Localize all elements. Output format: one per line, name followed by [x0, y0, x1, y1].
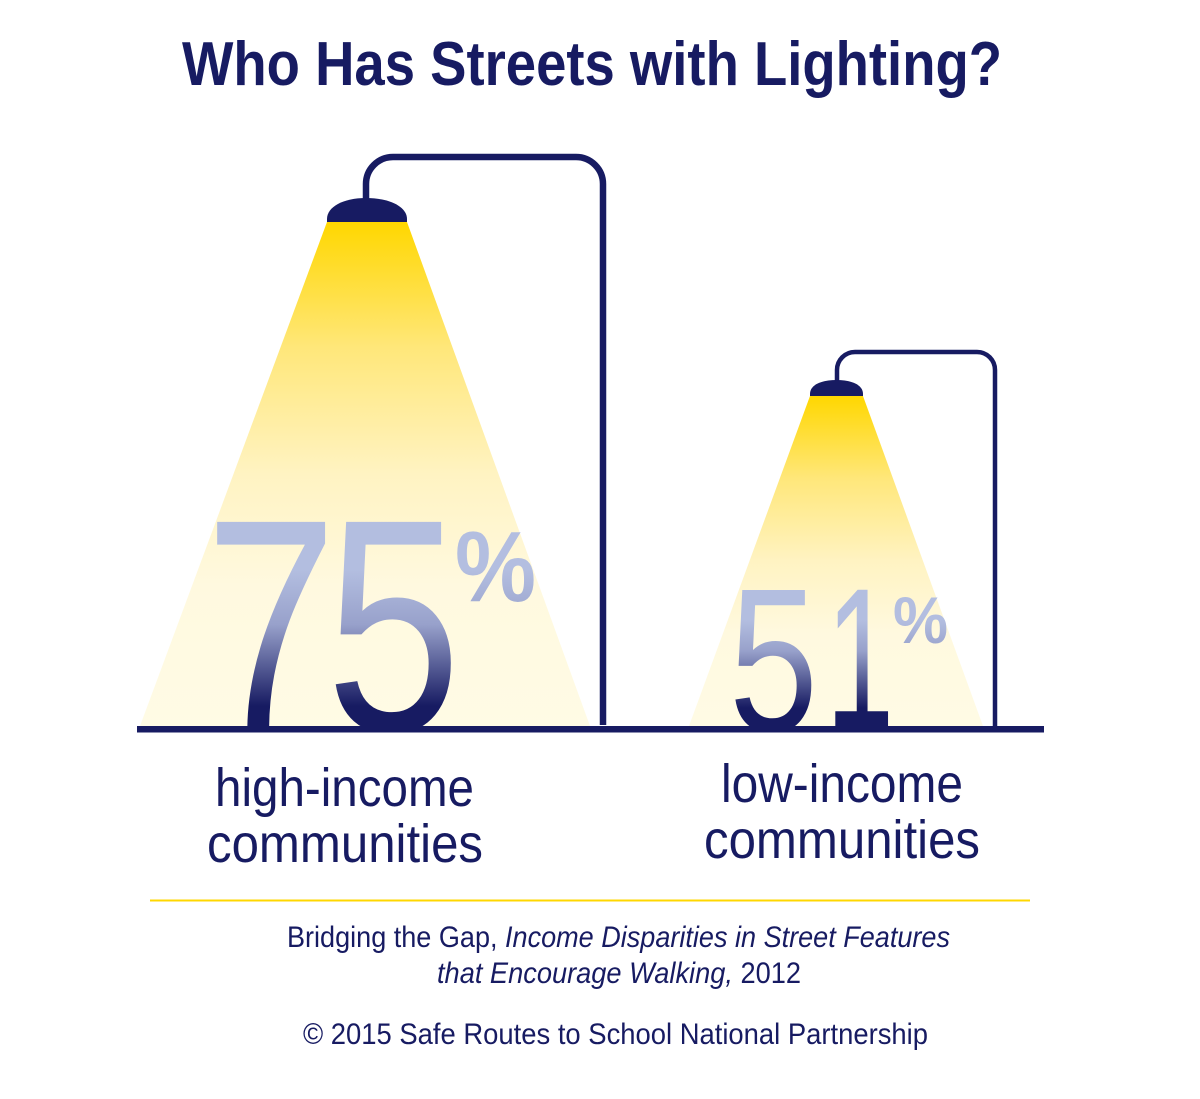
statistic: 51 percent: 5 — [729, 546, 818, 775]
source citation: that Encourage Walking, 2012 — [437, 957, 808, 990]
title: Who Has Streets with Lighting? — [182, 30, 1002, 99]
label: low-income communities: low-income — [721, 754, 963, 814]
statistic: 51 percent: 1 — [826, 547, 894, 768]
statistic: 75 percent: 5 — [326, 457, 461, 796]
lamp head: low-income — [810, 380, 863, 396]
label: low-income communities: communities — [704, 810, 980, 870]
lamp pole: low-income — [837, 352, 995, 727]
lamp pole: high-income — [366, 157, 603, 725]
statistic: 51 percent: % — [893, 583, 948, 657]
statistic: 75 percent: 7 — [205, 457, 337, 796]
label: high-income communities: communities — [207, 814, 483, 874]
statistic: 75 percent — [217, 522, 534, 726]
lamp head: high-income — [327, 198, 407, 222]
ground line — [137, 726, 1044, 732]
infographic — [137, 40, 1044, 1050]
source citation: Bridging the Gap, Income Disparities in Street Features — [287, 921, 999, 954]
statistic: 75 percent: % — [455, 511, 536, 623]
label: high-income communities: high-income — [215, 758, 474, 818]
light cone: high-income — [140, 222, 590, 726]
lamp: high-income communities — [140, 157, 603, 726]
copyright: © 2015 Safe Routes to School National Partnership — [303, 1018, 928, 1051]
light cone: low-income — [689, 396, 983, 726]
lamp: low-income communities — [689, 352, 995, 727]
divider — [150, 900, 1030, 902]
statistic: 51 percent — [735, 590, 946, 726]
